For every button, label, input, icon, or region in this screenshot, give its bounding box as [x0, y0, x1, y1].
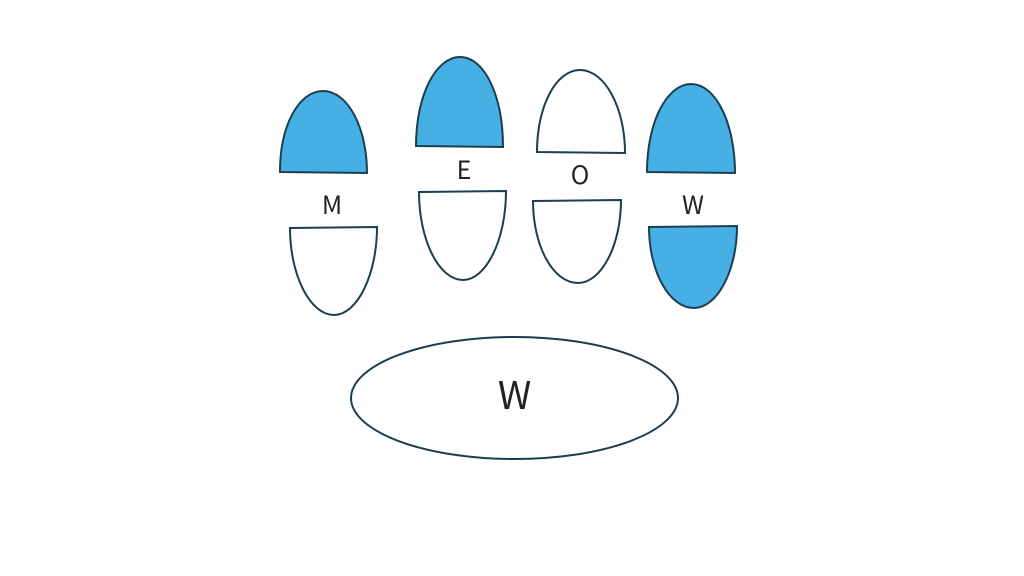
group: M [280, 91, 377, 315]
label: O: O [571, 156, 589, 192]
group: E [416, 57, 506, 280]
label: result W: W [498, 365, 531, 420]
result oval [351, 337, 678, 459]
shape: O top empty [537, 70, 625, 153]
shape: oval [351, 337, 678, 459]
label: E: E [457, 151, 471, 187]
group: W [647, 84, 737, 308]
shape: E bottom empty [419, 191, 506, 280]
group: O [533, 70, 625, 283]
shape: M top filled [280, 91, 367, 173]
label: M: M [322, 186, 342, 222]
shape: O bottom empty [533, 200, 621, 283]
shape: M bottom empty [290, 227, 377, 315]
label: W: W [682, 186, 704, 222]
shape: W bottom filled [649, 226, 737, 308]
shape: E top filled [416, 57, 503, 147]
shape: W top filled [647, 84, 735, 173]
